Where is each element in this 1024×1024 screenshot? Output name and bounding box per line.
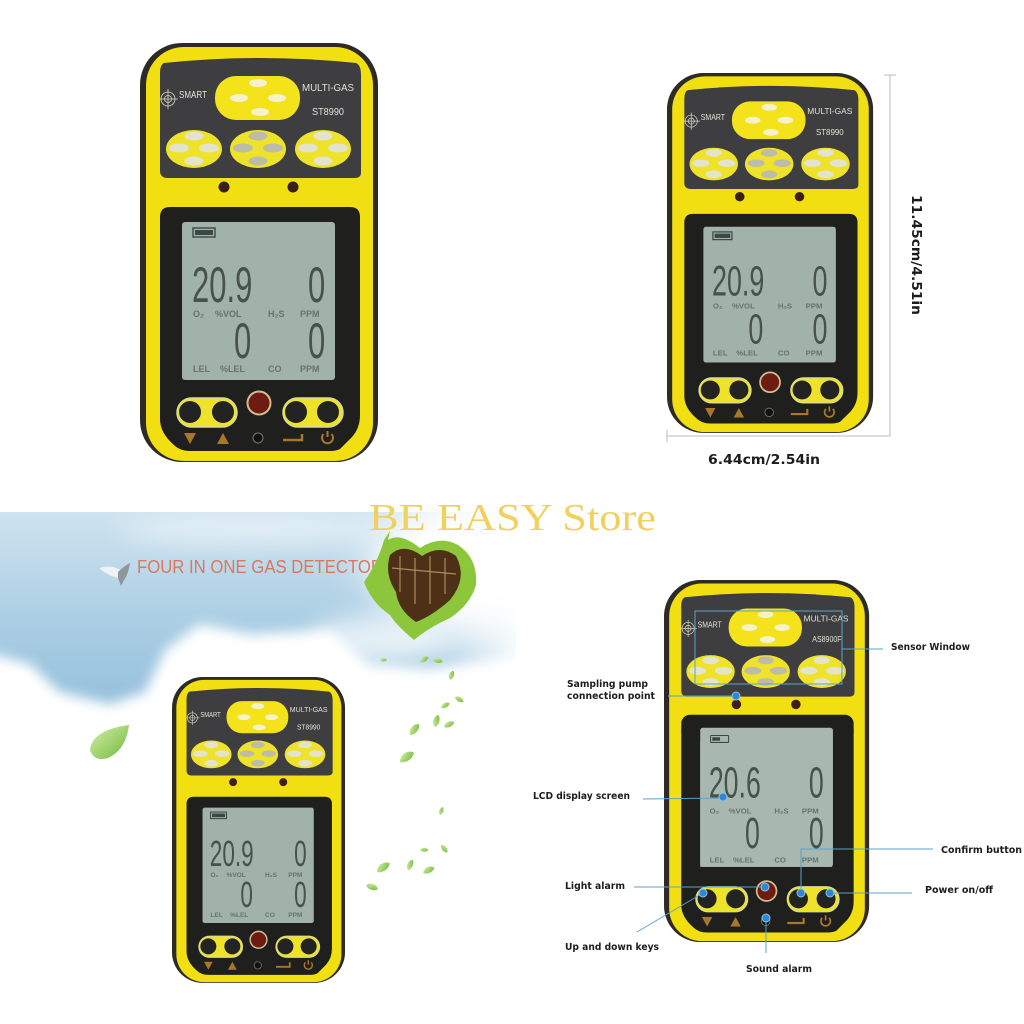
device: bottom left: 0 (240, 876, 253, 915)
watermark: store name: BE EASY Store (369, 497, 656, 539)
device: top right: %VOL (732, 301, 755, 310)
device: top right: PPM (806, 301, 822, 310)
label: sampling pump connection point: connection point (567, 691, 655, 702)
device: top right: MULTI-GAS (807, 106, 853, 116)
device: bottom right annotated: CO (774, 856, 786, 865)
panel: sky background (0, 512, 516, 711)
label: confirm button: Confirm button (941, 845, 1022, 856)
device: bottom left: 20.9 (210, 835, 254, 874)
device: bottom left: %VOL (227, 872, 246, 879)
device: bottom right annotated: LEL (710, 856, 725, 865)
device: bottom left: 0 (294, 835, 307, 874)
device: bottom right annotated: %VOL (729, 806, 752, 815)
device: top left: ST8990 (312, 107, 344, 118)
device: bottom right annotated: %LEL (733, 856, 755, 865)
device: top left: 0 (308, 312, 325, 369)
device: top right: LEL (713, 349, 728, 358)
device: top right: 0 (748, 305, 763, 353)
device: bottom right annotated: MULTI-GAS (804, 613, 849, 623)
device: top right: SMART (701, 112, 726, 122)
device: bottom left: H₂S (265, 872, 278, 879)
device: bottom left: LEL (211, 912, 223, 919)
device: bottom left: PPM (288, 912, 303, 919)
device: bottom left: %LEL (230, 912, 248, 919)
device: bottom right annotated: 20.6 (709, 758, 761, 807)
device: top left: SMART (179, 90, 207, 101)
icon: large leaf (90, 725, 129, 759)
device: bottom left: O₂ (211, 872, 219, 879)
device: top left: 0 (234, 312, 251, 369)
label: lcd display screen: LCD display screen (533, 791, 630, 802)
device: top right: PPM (806, 349, 822, 358)
device: bottom right annotated: AS8900F (812, 634, 842, 644)
icon: green leafy heart (364, 531, 476, 640)
device: top left: 0 (308, 256, 325, 313)
device: bottom right annotated: 0 (809, 808, 824, 857)
device: bottom left: MULTI-GAS (290, 705, 328, 714)
device: bottom right annotated: SMART (698, 620, 722, 630)
device: bottom right annotated: PPM (802, 856, 819, 865)
device: bottom right annotated: O₂ (710, 806, 720, 815)
device: top left: PPM (300, 309, 320, 319)
dimension: height (667, 75, 923, 442)
device: top left: CO (268, 364, 282, 374)
label: power on/off: Power on/off (925, 885, 994, 896)
label: up and down keys: Up and down keys (565, 942, 659, 953)
device: top right: H₂S (778, 301, 792, 310)
label: sampling pump connection point (567, 679, 655, 702)
device: bottom left: ST8990 (297, 723, 320, 732)
heading: four in one gas detector: FOUR IN ONE GAS DETECTOR (137, 557, 383, 577)
callout lines and markers (634, 611, 933, 953)
device: bottom left: 0 (294, 876, 307, 915)
device: top right: 20.9 (712, 257, 764, 305)
label: sound alarm: Sound alarm (746, 964, 812, 975)
label: sampling pump connection point: Sampling pump (567, 679, 648, 690)
device: bottom right annotated: 0 (745, 808, 760, 857)
label: light alarm: Light alarm (565, 881, 625, 892)
device: bottom left (172, 677, 345, 983)
device: top right: ST8990 (816, 127, 844, 137)
device: bottom left: SMART (200, 710, 221, 719)
device: top right: 0 (812, 257, 827, 305)
label: sensor window: Sensor Window (891, 642, 970, 653)
device: top left: H₂S (268, 309, 285, 319)
icon: bird (99, 563, 130, 586)
device: bottom right annotated: H₂S (774, 806, 789, 815)
device: bottom right annotated: PPM (802, 806, 819, 815)
icons: scattered leaves (365, 655, 465, 892)
device: bottom left: CO (265, 912, 275, 919)
device: bottom right annotated (664, 580, 869, 942)
device: top left: LEL (193, 364, 211, 374)
device: top right: %LEL (736, 349, 758, 358)
device: top right: 0 (812, 305, 827, 353)
device: top left (140, 43, 378, 462)
device: top right: O₂ (713, 301, 723, 310)
device: top left: PPM (300, 364, 320, 374)
device: top right: CO (778, 349, 790, 358)
device: top left: MULTI-GAS (302, 83, 354, 94)
device: top right (667, 73, 873, 433)
dimension: height: 11.45cm/4.51in (908, 195, 923, 315)
device: top left: 20.9 (192, 256, 252, 313)
dimension: width: 6.44cm/2.54in (708, 453, 820, 468)
device: top left: O₂ (193, 309, 204, 319)
device: bottom left: PPM (288, 872, 303, 879)
device: top left: %VOL (215, 309, 242, 319)
device: top left: %LEL (220, 364, 246, 374)
device: bottom right annotated: 0 (809, 758, 824, 807)
